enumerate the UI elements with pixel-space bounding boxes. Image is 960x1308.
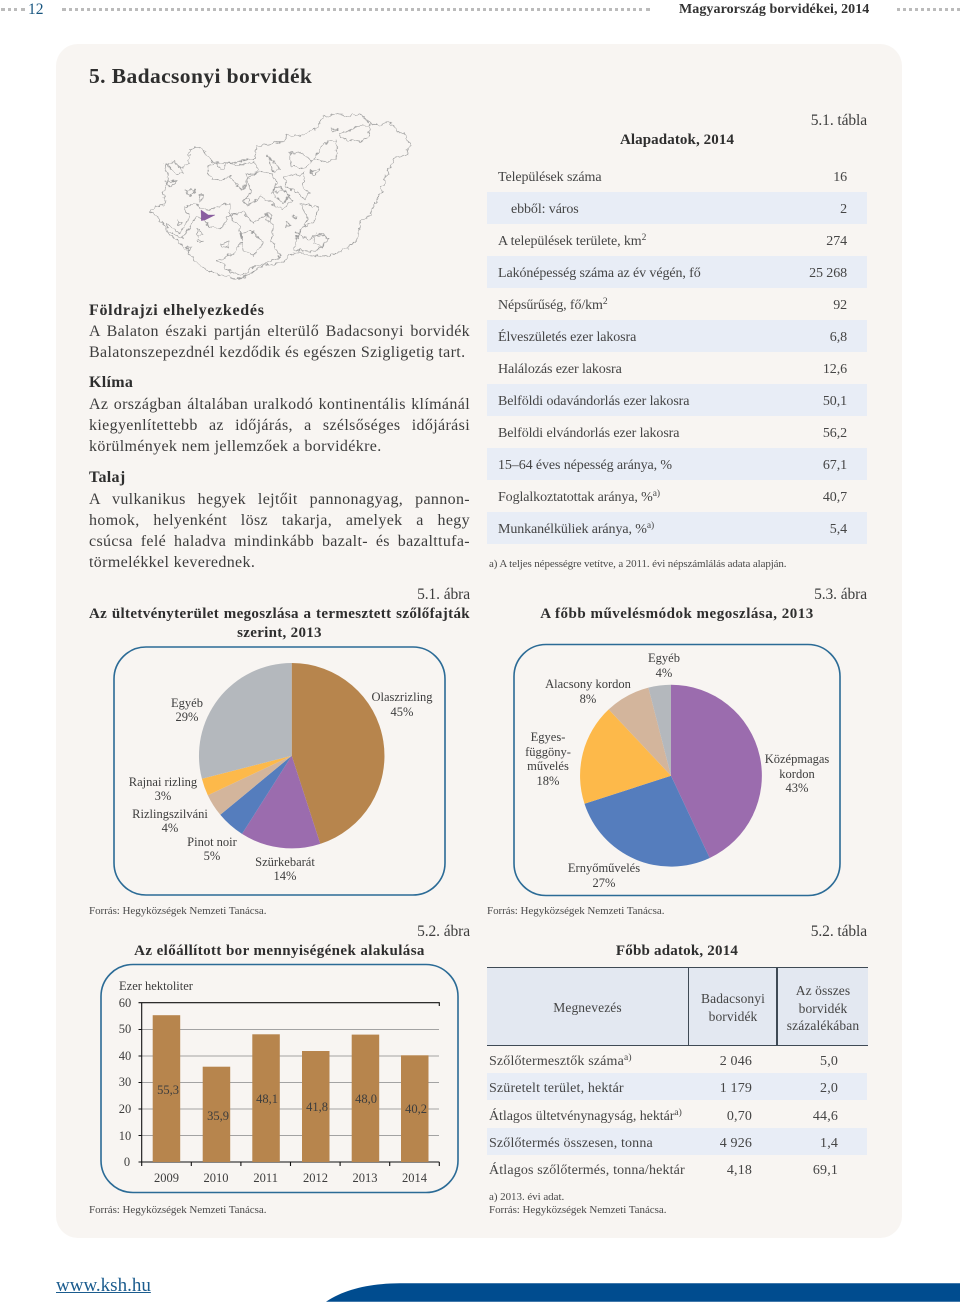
row: 5,0: [820, 1054, 838, 1069]
header: region: [701, 991, 765, 1024]
heading: Talaj: [89, 469, 125, 486]
row: ebből: város: [511, 202, 579, 217]
row: 67,1: [823, 458, 847, 473]
body line 1: A vulkanikus hegyek lejtőit pannonagyag, pannon-: [89, 491, 470, 508]
pie chart: grape varieties: 29%: [176, 710, 198, 724]
row: 2,0: [820, 1081, 838, 1096]
row: [487, 1073, 867, 1100]
pie chart: cultivation methods: 4%: [656, 666, 672, 680]
row: 274: [826, 234, 847, 249]
table: main data: [487, 967, 868, 1178]
footer link: www.ksh.hu: [56, 1275, 151, 1296]
right dotted rule: [897, 8, 960, 11]
bar chart: wine production: 2014: [402, 1171, 428, 1185]
figure 5.1 label: 5.1. ábra: [417, 586, 470, 603]
row: Belföldi odavándorlás ezer lakosra: [498, 394, 689, 409]
page number: 12: [28, 1, 44, 18]
table 5.2 label: 5.2. tábla: [811, 923, 867, 940]
bar chart: wine production: 35,9: [207, 1109, 229, 1123]
row: 1,4: [820, 1136, 838, 1151]
pie chart: cultivation methods: 27%: [593, 876, 615, 890]
row: [487, 192, 867, 224]
source note, figure 5.2: Forrás: Hegyközségek Nemzeti Tanácsa.: [89, 1204, 266, 1216]
bar chart: wine production: 48,1: [256, 1092, 278, 1106]
pie chart: cultivation methods: művelés: [527, 759, 569, 773]
pie chart: cultivation methods: függöny-: [525, 745, 571, 759]
body line 3: körülmények nem jellemzőek a borvidékre.: [89, 438, 382, 455]
row: 40,7: [823, 490, 847, 505]
pie chart: grape varieties: 4%: [162, 821, 178, 835]
row: [498, 362, 847, 377]
header: share: [787, 983, 859, 1033]
row: [489, 1108, 838, 1124]
row: 50,1: [823, 394, 847, 409]
bar chart: wine production: 40: [119, 1049, 131, 1063]
title line 1: Az ültetvényterület megoszlása a termesztett szőlőfajták: [89, 606, 470, 622]
figure 5.2 label: 5.2. ábra: [417, 923, 470, 940]
title line 2: szerint, 2013: [237, 625, 322, 641]
bar chart: wine production: 10: [119, 1129, 131, 1143]
source note, figure 5.3: Forrás: Hegyközségek Nemzeti Tanácsa.: [487, 905, 664, 917]
row: [498, 170, 847, 185]
row: [487, 512, 867, 544]
row: Átlagos szőlőtermés, tonna/hektár: [489, 1163, 685, 1178]
row: 16: [833, 170, 847, 185]
bar chart: wine production: 60: [119, 996, 131, 1010]
heading: Földrajzi elhelyezkedés: [89, 302, 265, 319]
bar chart: wine production: Ezer hektoliter: [119, 979, 194, 993]
row: 69,1: [813, 1163, 838, 1178]
row: Halálozás ezer lakosra: [498, 362, 622, 377]
bar chart: wine production: 41,8: [306, 1100, 328, 1114]
pie chart: grape varieties: Szürkebarát: [255, 855, 315, 869]
pie chart: cultivation methods: Középmagas: [765, 752, 829, 766]
text: geographic location: [89, 302, 470, 361]
first column divider: [688, 968, 689, 1045]
bar chart: wine production: 20: [119, 1102, 131, 1116]
header: name: Megnevezés: [553, 1000, 622, 1015]
row: 1 179: [720, 1081, 752, 1096]
body line 3: csúcsa felé haladva mindinkább bazalt- és bazalttufa-: [89, 533, 470, 550]
pie chart: cultivation methods: Egyéb: [648, 651, 680, 665]
row: 2 046: [720, 1054, 752, 1069]
row: [489, 1053, 838, 1069]
row: Átlagos ültetvénynagyság, hektára): [489, 1108, 682, 1124]
bar chart: wine production: 30: [119, 1075, 131, 1089]
row: Lakónépesség száma az év végén, fő: [498, 266, 701, 281]
row: Foglalkoztatottak aránya, %a): [498, 489, 660, 505]
row: 44,6: [813, 1109, 838, 1124]
table 5.1 label: 5.1. tábla: [811, 112, 867, 129]
body line 1: Az országban általában uralkodó kontinentális klímánál: [89, 396, 470, 413]
figure 5.1 title: [89, 606, 470, 641]
source note, figure 5.1: Forrás: Hegyközségek Nemzeti Tanácsa.: [89, 905, 266, 917]
table: basic data: [487, 170, 867, 544]
bar chart: wine production: 2013: [352, 1171, 378, 1185]
row: Szüretelt terület, hektár: [489, 1081, 624, 1096]
row: A települések területe, km2: [498, 233, 646, 249]
bar chart: wine production: 2009: [154, 1171, 179, 1185]
header: share: százalékában: [787, 1018, 859, 1033]
row: [489, 1162, 838, 1178]
bar chart: wine production: 2011: [253, 1171, 278, 1185]
row: 0,70: [727, 1109, 752, 1124]
table footnote: a) 2013. évi adat.: [489, 1191, 564, 1203]
left dotted rule: [1, 8, 25, 11]
pie chart: grape varieties: Rajnai rizling: [129, 775, 198, 789]
row: [498, 426, 847, 441]
header: region: borvidék: [709, 1008, 757, 1024]
bar chart: wine production: 55,3: [157, 1083, 179, 1097]
pie chart: grape varieties: 3%: [155, 789, 171, 803]
pie chart: cultivation methods: kordon: [779, 767, 815, 781]
row: 12,6: [823, 362, 847, 377]
table 5.1 title: Alapadatok, 2014: [620, 132, 734, 148]
pie chart: grape varieties: 45%: [391, 705, 413, 719]
row: Belföldi elvándorlás ezer lakosra: [498, 426, 679, 441]
table 5.2 title: Főbb adatok, 2014: [616, 943, 738, 959]
bar chart: wine production: 2010: [204, 1171, 228, 1185]
running title: Magyarország borvidékei, 2014: [679, 2, 869, 17]
bar chart: wine production: 2012: [303, 1171, 328, 1185]
body line 1: A Balaton északi partján elterülő Badacsonyi borvidék: [89, 323, 470, 340]
row: 4,18: [727, 1163, 752, 1178]
text: climate: [89, 374, 470, 455]
header: share: Az összes: [796, 983, 850, 998]
row: [498, 233, 847, 249]
bar chart: wine production: 48,0: [355, 1092, 377, 1106]
pie chart: grape varieties: 14%: [274, 869, 296, 883]
row: [498, 489, 847, 505]
pie chart: grape varieties: Pinot noir: [187, 835, 238, 849]
row: 15–64 éves népesség aránya, %: [498, 458, 672, 473]
row: Szőlőtermesztők számaa): [489, 1053, 632, 1069]
figure 5.3 label: 5.3. ábra: [814, 586, 867, 603]
row: Szőlőtermés összesen, tonna: [489, 1136, 653, 1151]
row: [487, 384, 867, 416]
row: 6,8: [830, 330, 847, 345]
bar chart: wine production: 40,2: [405, 1102, 427, 1116]
row: [487, 256, 867, 288]
pie chart: cultivation methods: 18%: [537, 774, 559, 788]
row: 4 926: [720, 1136, 752, 1151]
figure 5.3 title: A főbb művelésmódok megoszlása, 2013: [540, 606, 814, 622]
row: [498, 297, 847, 313]
figure 5.2 title: Az előállított bor mennyiségének alakulása: [134, 943, 425, 959]
pie chart: cultivation methods: Egyes-: [531, 730, 565, 744]
body line 2: homok, helyenként lösz takarja, amelyek a hegy: [89, 512, 470, 529]
pie chart: grape varieties: 5%: [204, 849, 220, 863]
main title: 5. Badacsonyi borvidék: [89, 64, 312, 88]
bar chart: wine production: 50: [119, 1022, 131, 1036]
row: 25 268: [809, 266, 847, 281]
pie chart: grape varieties: Egyéb: [171, 696, 203, 710]
header: region: Badacsonyi: [701, 991, 765, 1006]
row: 56,2: [823, 426, 847, 441]
row: [487, 1128, 867, 1155]
page header: [1, 1, 960, 18]
pie chart: cultivation methods: 43%: [786, 781, 808, 795]
middle dotted rule: [62, 8, 650, 11]
row: Élveszületés ezer lakosra: [498, 330, 636, 345]
header: share: borvidék: [799, 1000, 847, 1016]
row: Népsűrűség, fő/km2: [498, 297, 608, 313]
pie chart: cultivation methods: Alacsony kordon: [545, 677, 632, 691]
row: Munkanélküliek aránya, %a): [498, 521, 654, 537]
body line 2: kiegyenlítettebb az időjárás, a szélsőséges időjárási: [89, 417, 470, 434]
pie chart: grape varieties: Rizlingszilváni: [132, 807, 208, 821]
row: 5,4: [830, 522, 847, 537]
pie chart: cultivation methods: 8%: [580, 692, 596, 706]
row: 2: [840, 202, 847, 217]
text: soil: [89, 469, 470, 571]
row: Települések száma: [498, 170, 601, 185]
row: [487, 448, 867, 480]
row: [487, 320, 867, 352]
pie chart: grape varieties: Olaszrizling: [371, 690, 433, 704]
body line 2: Balatonszepezdnél kezdődik és egészen Szigligetig tart.: [89, 344, 465, 361]
second column divider: [776, 968, 778, 1045]
body line 4: törmelékkel keverednek.: [89, 554, 255, 571]
table footnote: a) A teljes népességre vetítve, a 2011. évi népszámlálás adata alapján.: [489, 558, 786, 570]
source note, table 5.2: Forrás: Hegyközségek Nemzeti Tanácsa.: [489, 1204, 666, 1216]
table header: [487, 967, 868, 1046]
pie chart: cultivation methods: Ernyőművelés: [568, 861, 640, 875]
heading: Klíma: [89, 374, 133, 391]
bar chart: wine production: 0: [124, 1155, 130, 1169]
row: 92: [833, 298, 847, 313]
